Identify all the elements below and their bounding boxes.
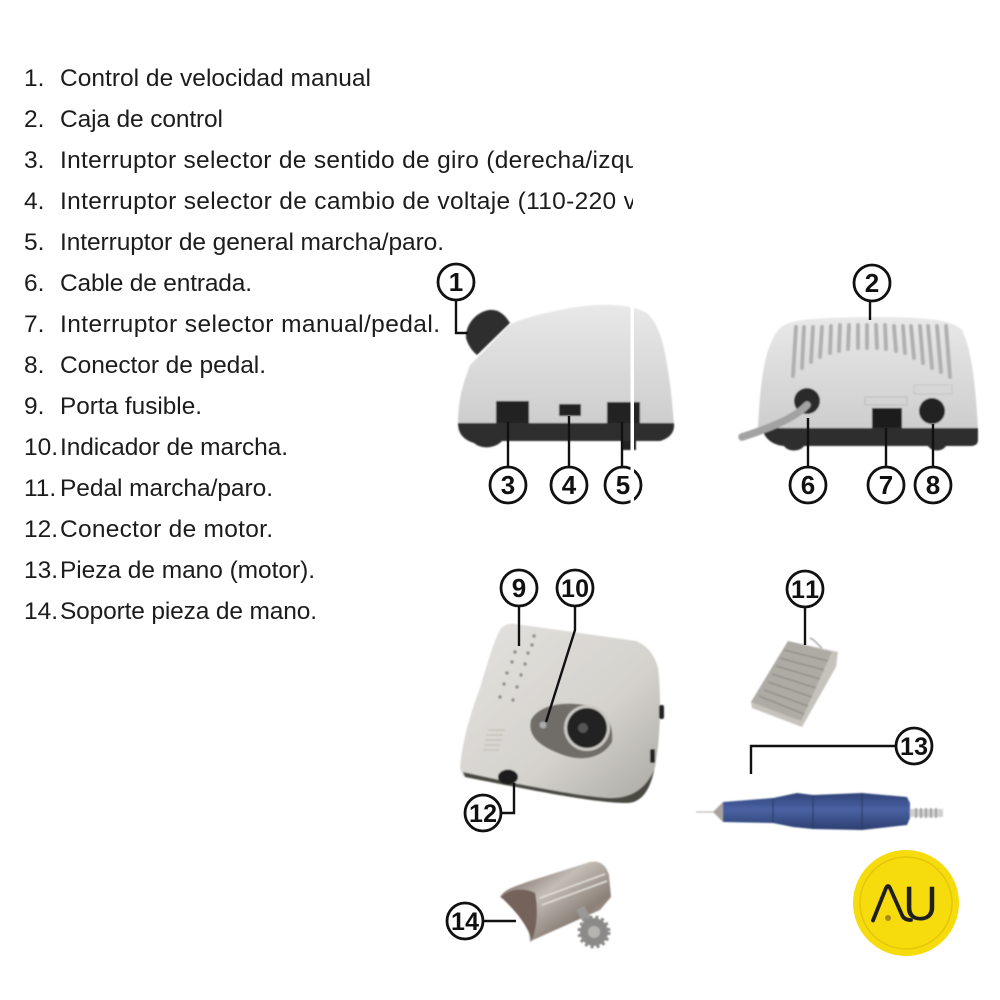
list item 4: Interruptor selector de cambio de voltaje (110-220 vac). [60,188,678,215]
callout 3 [490,422,526,503]
list item 7: 7. [24,311,44,338]
list item 2: 2. [24,106,44,133]
list item 3: Interruptor selector de sentido de giro (derecha/izquierda). [60,147,710,174]
callout 4: 4 [562,470,577,500]
logo: AU [871,878,938,931]
panel: control box side view [438,264,674,508]
white seam [630,303,634,508]
list item 8: Conector de pedal. [60,352,266,379]
callout 2: 2 [865,268,879,298]
list item 11: 11. [24,475,56,502]
list item 14: Soporte pieza de mano. [60,598,317,625]
callout 14 [447,903,516,939]
holder drawing [500,862,611,947]
callout 7 [868,428,904,503]
callout 14: 14 [451,908,479,936]
panel: control box top view [460,570,664,831]
callout 13: 13 [900,733,928,761]
list item 4: 4. [24,188,44,215]
panel: handpiece [696,728,943,830]
list item 5: 5. [24,229,44,256]
callout 11 [787,571,823,645]
list item 8: 8. [24,352,44,379]
list item 2: Caja de control [60,106,223,133]
list item 6: 6. [24,270,44,297]
callout 11: 11 [791,576,819,604]
list item 11: Pedal marcha/paro. [60,475,273,502]
top view body [460,624,664,803]
callout 6: 6 [801,470,815,500]
list item 7: Interruptor selector manual/pedal. [60,311,440,338]
callout 8: 8 [926,470,940,500]
callout 5: 5 [616,470,630,500]
callout 8 [915,424,951,503]
side view body [458,305,674,450]
list item 12: Conector de motor. [60,516,273,543]
callout 13 [751,728,932,774]
panel: control box rear view [742,265,978,503]
list item 14: 14. [24,598,58,625]
handpiece drawing [696,793,943,830]
rear view body [742,317,978,450]
callout 5 [605,422,641,503]
panel: foot pedal [751,571,838,727]
callout 4 [551,416,587,503]
list item 12: 12. [24,516,58,543]
callout 7: 7 [879,470,893,500]
panel: handpiece holder [447,862,611,947]
callout 10 [546,570,593,722]
list item 9: Porta fusible. [60,393,202,420]
logo [853,850,959,956]
callout 12: 12 [469,800,497,828]
list item 1: Control de velocidad manual [60,65,371,92]
callout 9: 9 [512,573,526,603]
list item 13: 13. [24,557,58,584]
callout 12 [465,783,514,831]
list item 13: Pieza de mano (motor). [60,557,315,584]
list item 6: Cable de entrada. [60,270,252,297]
list item 1: 1. [24,65,44,92]
callout 1: 1 [449,267,463,297]
list item 3: 3. [24,147,44,174]
list item 9: 9. [24,393,44,420]
callout 9 [501,570,537,646]
pedal drawing [751,638,838,727]
callout 3: 3 [501,470,515,500]
callout 6 [790,418,826,503]
callout 1 [438,264,474,333]
list item 10: 10. [24,434,58,461]
callout 10: 10 [561,575,589,603]
parts list [24,65,710,625]
list item 10: Indicador de marcha. [60,434,288,461]
list item 5: Interruptor de general marcha/paro. [60,229,444,256]
callout 2 [854,265,890,320]
